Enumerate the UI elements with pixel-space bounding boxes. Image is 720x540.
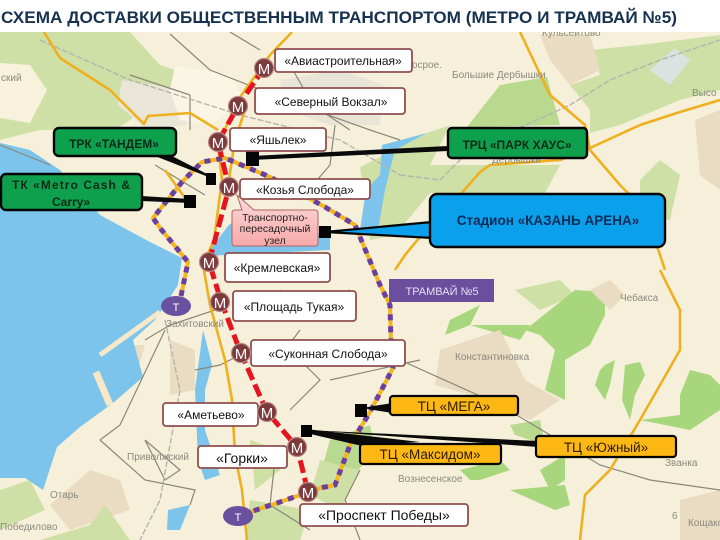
label: Северный Вокзал xyxy=(255,88,405,114)
metro station icons: М xyxy=(203,255,215,272)
callout: ТК Metro Cash & Carry: ТК «Metro Cash & xyxy=(12,178,130,192)
metro station icons: М xyxy=(261,405,273,422)
metro line xyxy=(209,68,308,492)
label: Трамвай № 5 xyxy=(389,279,494,302)
label: Авиастроительная xyxy=(275,49,412,72)
callout: ТЦ МЕГА xyxy=(355,396,518,417)
callout: ТЦ Южный: ТЦ «Южный» xyxy=(564,440,648,455)
label: Авиастроительная: «Авиастроительная» xyxy=(284,54,402,68)
map background: Чебакса xyxy=(620,292,659,304)
water: Volga xyxy=(0,143,182,490)
tram route no. 5 line xyxy=(153,158,393,516)
callout: Транспортно-пересадочный узел: Транспортно- xyxy=(242,212,308,224)
metro station icons: М xyxy=(302,485,314,502)
callout: ТРЦ ПАРК ХАУС: ТРЦ «ПАРК ХАУС» xyxy=(462,138,572,152)
map background: ский xyxy=(1,73,22,84)
map background: Константиновка xyxy=(455,352,530,363)
callout: ТК Metro Cash & Carry xyxy=(1,174,196,210)
map background: Кульсеитово xyxy=(542,28,601,39)
label: Площадь Тукая: «Площадь Тукая» xyxy=(244,300,344,314)
tram stop icon: north xyxy=(161,296,191,316)
label: Суконная Слобода: «Суконная Слобода» xyxy=(268,347,388,361)
label: Кремлевская xyxy=(225,253,330,282)
title: СХЕМА ДОСТАВКИ ОБЩЕСТВЕННЫМ ТРАНСПОРТОМ (МЕТРО И ТРАМВАЙ №5) xyxy=(1,8,677,27)
metro station icons: М xyxy=(291,440,303,457)
map background: Высо xyxy=(692,88,717,99)
map background: осрое. xyxy=(412,60,442,71)
label: Проспект Победы: «Проспект Победы» xyxy=(318,507,450,523)
metro station icons: М xyxy=(223,180,235,197)
callout: Стадион КАЗАНЬ АРЕНА: Стадион «КАЗАНЬ АРЕНА» xyxy=(457,213,639,228)
metro station icons xyxy=(200,58,318,502)
label: Горки xyxy=(198,446,287,468)
label: Суконная Слобода xyxy=(251,340,405,366)
map background: Дербышки xyxy=(492,154,541,166)
callout: ТЦ Максидом xyxy=(301,425,501,464)
label: Площадь Тукая xyxy=(233,291,356,321)
map background: Победилово xyxy=(0,521,58,533)
map background: Большие Дербышки xyxy=(452,69,546,81)
map background: Отарь xyxy=(50,490,79,501)
label: Козья Слобода: «Козья Слобода» xyxy=(256,183,354,197)
map background: Приволжский xyxy=(127,452,189,463)
callout: ТЦ МЕГА: ТЦ «МЕГА» xyxy=(418,399,490,414)
tram stop icon: north: Т xyxy=(173,302,180,314)
title band xyxy=(0,0,720,32)
callout: ТЦ Южный xyxy=(306,430,676,457)
label: Аметьево xyxy=(163,403,258,426)
map background: Званка xyxy=(665,458,698,469)
callout: ТРК ТАНДЕМ xyxy=(54,128,216,185)
callout: ТК Metro Cash & Carry: Carry» xyxy=(52,195,90,209)
metro station icons: М xyxy=(212,135,224,152)
callout: Транспортно-пересадочный узел xyxy=(232,195,318,247)
label: Горки: «Горки» xyxy=(216,450,268,466)
map background: Захитовский xyxy=(166,319,224,330)
callout: Транспортно-пересадочный узел: узел xyxy=(264,235,286,247)
callout: ТЦ Максидом: ТЦ «Максидом» xyxy=(380,447,480,462)
label: Кремлевская: «Кремлевская» xyxy=(234,261,321,275)
callout: ТРЦ ПАРК ХАУС xyxy=(246,128,587,166)
page number: 6 xyxy=(672,511,678,522)
metro station icons: М xyxy=(235,346,247,363)
label: Проспект Победы xyxy=(300,504,468,526)
tram stop icon: south: Т xyxy=(235,512,242,524)
callout: Стадион КАЗАНЬ АРЕНА xyxy=(319,194,665,247)
metro station icons: М xyxy=(258,61,270,78)
map background: Вознесенское xyxy=(398,474,463,485)
callout: Транспортно-пересадочный узел: пересадочный xyxy=(240,223,310,235)
label: Яшьлек xyxy=(230,128,326,151)
callout: ТРК ТАНДЕМ: ТРК «ТАНДЕМ» xyxy=(69,137,159,151)
label: Трамвай № 5: ТРАМВАЙ №5 xyxy=(405,285,479,298)
label: Северный Вокзал: «Северный Вокзал» xyxy=(275,95,388,109)
label: Яшьлек: «Яшьлек» xyxy=(250,133,307,147)
label: Аметьево: «Аметьево» xyxy=(177,408,245,422)
tram stop icon: south xyxy=(223,506,253,526)
label: Козья Слобода xyxy=(240,179,370,199)
metro station icons: М xyxy=(214,295,226,312)
metro station icons: М xyxy=(232,99,244,116)
